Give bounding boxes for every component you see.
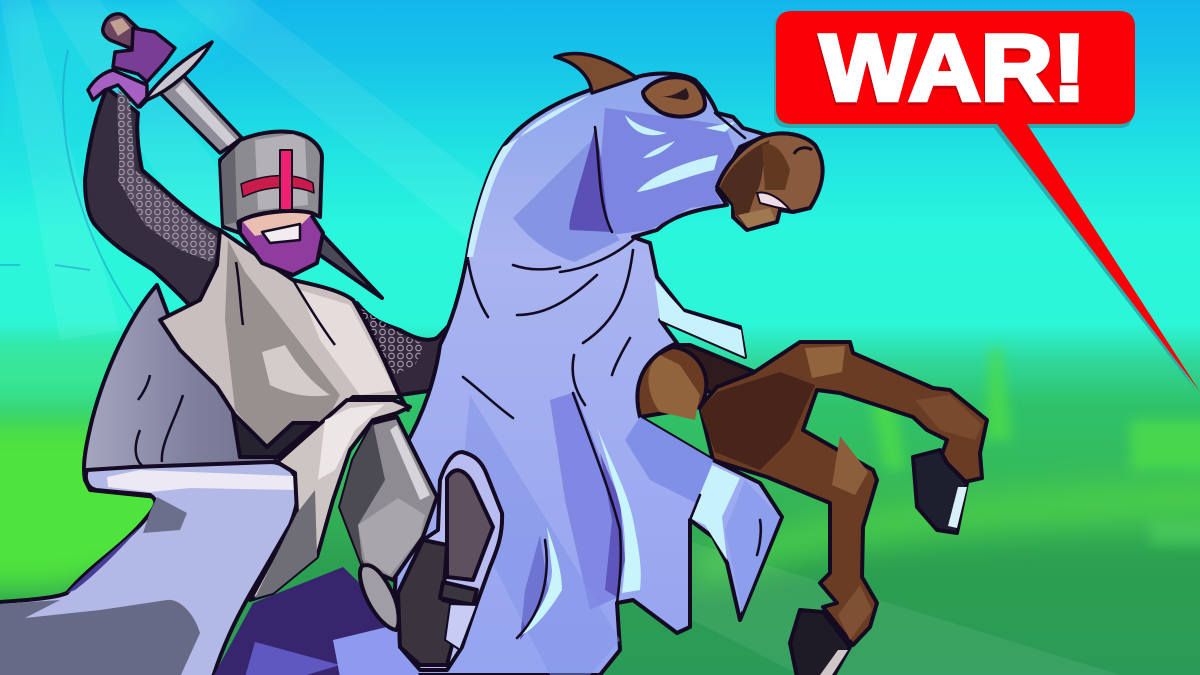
knight lower cape [0,462,297,675]
knight raised arm in chainmail [85,88,225,337]
knight folded tunic over the leg [250,400,410,600]
knight spur [360,565,399,630]
bubble label shadow: WAR! [819,18,1085,123]
knight gauntlet [88,28,175,107]
horse eye patch [643,77,705,117]
horse caparison drape [390,74,782,675]
horse head shading [600,108,735,235]
bubble body [776,11,1200,392]
drape folds [463,113,761,638]
knight upper cape [84,285,300,497]
purple shadow under the knight [213,567,420,675]
knight boot [398,452,502,670]
drape highlights [625,115,735,192]
speech bubble: WAR! [774,11,1200,392]
horse hooves [790,450,967,675]
bubble label: WAR! [820,15,1086,120]
chainmail forearm behind the drape [357,303,457,395]
knight tabard [160,230,408,460]
bubble shadow [774,15,1197,392]
horse legs [637,342,987,645]
horse ear [555,54,637,93]
motion lines [0,50,170,360]
knight sword [103,14,242,153]
knight leg armor [340,417,437,580]
knight helmet and face [220,132,382,298]
horse muzzle [717,133,823,230]
drape shading [550,392,622,610]
